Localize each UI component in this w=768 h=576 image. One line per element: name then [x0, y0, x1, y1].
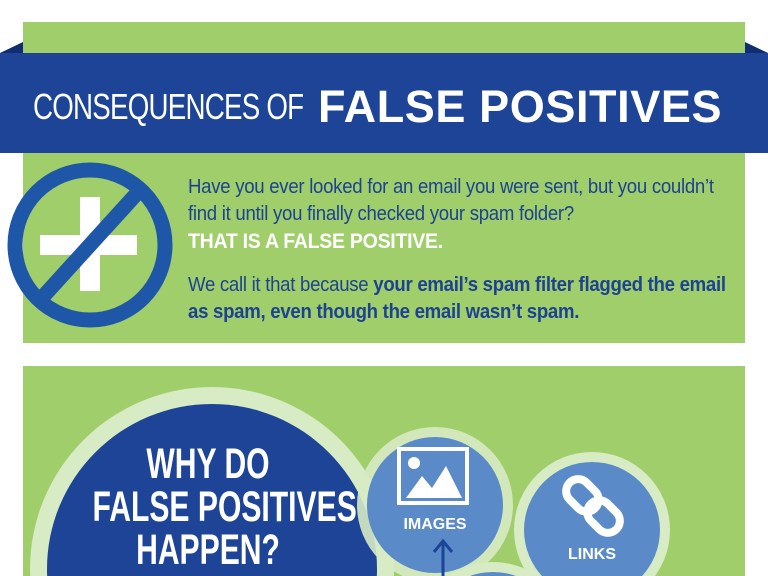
- panel: definition: [23, 153, 745, 343]
- ribbon fold left: [0, 42, 23, 53]
- text: as spam, even though the email wasn’t spam.: [188, 301, 579, 323]
- icon: no plus sign: [8, 162, 172, 328]
- heading: why do false positives happen: WHY DO: [146, 440, 270, 488]
- arrow: [433, 538, 453, 576]
- title banner: FALSE POSITIVES: [318, 81, 722, 132]
- text: find it until you finally checked your spam folder?: [188, 203, 574, 225]
- circle: images: [357, 427, 513, 576]
- icon: link: [562, 475, 624, 537]
- icon: image: [397, 447, 469, 505]
- heading: why do false positives happen: FALSE POSITIVES: [92, 483, 357, 531]
- text block: explanation: We call it that because your email’s spam filter flagged the email: [188, 274, 726, 296]
- top green strip: [23, 22, 745, 62]
- title banner: [0, 53, 768, 153]
- label: images: IMAGES: [403, 516, 467, 533]
- title banner: CONSEQUENCES OF: [33, 86, 303, 127]
- text block: highlight: THAT IS A FALSE POSITIVE.: [188, 230, 443, 253]
- heading: why do false positives happen: [92, 440, 357, 574]
- ribbon fold right: [745, 42, 768, 53]
- panel: why: [23, 366, 745, 576]
- heading: why do false positives happen: HAPPEN?: [136, 526, 280, 574]
- text block: question: Have you ever looked for an email you were sent, but you couldn’t: [188, 176, 714, 198]
- label: links: LINKS: [568, 546, 616, 563]
- circle: links: [514, 452, 670, 576]
- circle: bottom partial: [415, 562, 571, 576]
- big circle: [30, 387, 394, 576]
